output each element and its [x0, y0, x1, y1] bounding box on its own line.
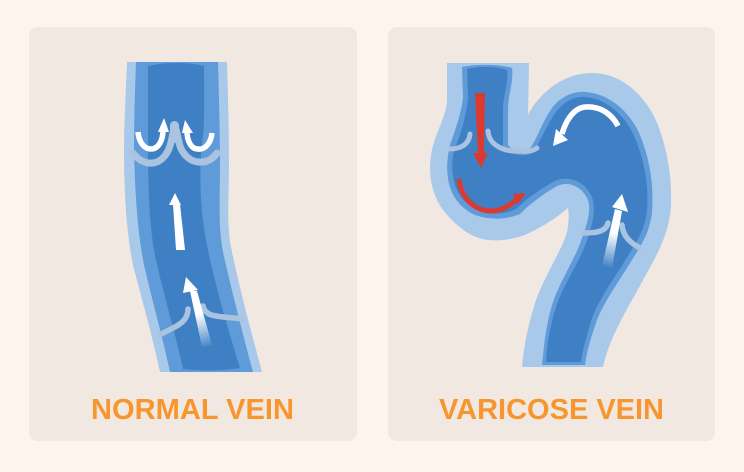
valve: upper leaflets	[133, 126, 217, 163]
arrow: center upward flow	[169, 193, 185, 250]
arrow: red curved reflux	[459, 179, 526, 211]
valve: lower leaflets	[583, 223, 640, 248]
arrow: red downward reflux	[473, 93, 488, 168]
arrow: right curved flow	[182, 120, 212, 149]
vein wall: normal vein outer layer	[124, 62, 262, 372]
arrow: lower fading flow	[602, 194, 628, 268]
label: varicose vein: VARICOSE VEIN	[439, 394, 664, 426]
label: normal vein: NORMAL VEIN	[91, 394, 294, 426]
valve tip	[170, 121, 179, 143]
panel: normal vein	[29, 27, 357, 441]
vein body: varicose vein middle layer	[447, 65, 652, 365]
vein body: normal vein middle layer	[134, 62, 253, 372]
vein wall: varicose vein outer layer	[430, 63, 671, 367]
arrow: white curved flow	[553, 107, 618, 146]
panel: varicose vein	[388, 27, 715, 441]
vein lumen: varicose vein dark core	[452, 67, 648, 362]
arrow: left curved flow	[138, 118, 169, 149]
valve: upper leaflets	[450, 131, 537, 151]
vein lumen: normal vein dark core	[148, 63, 240, 370]
valve: lower leaflets	[160, 306, 242, 335]
arrow: lower fading flow	[183, 277, 212, 347]
